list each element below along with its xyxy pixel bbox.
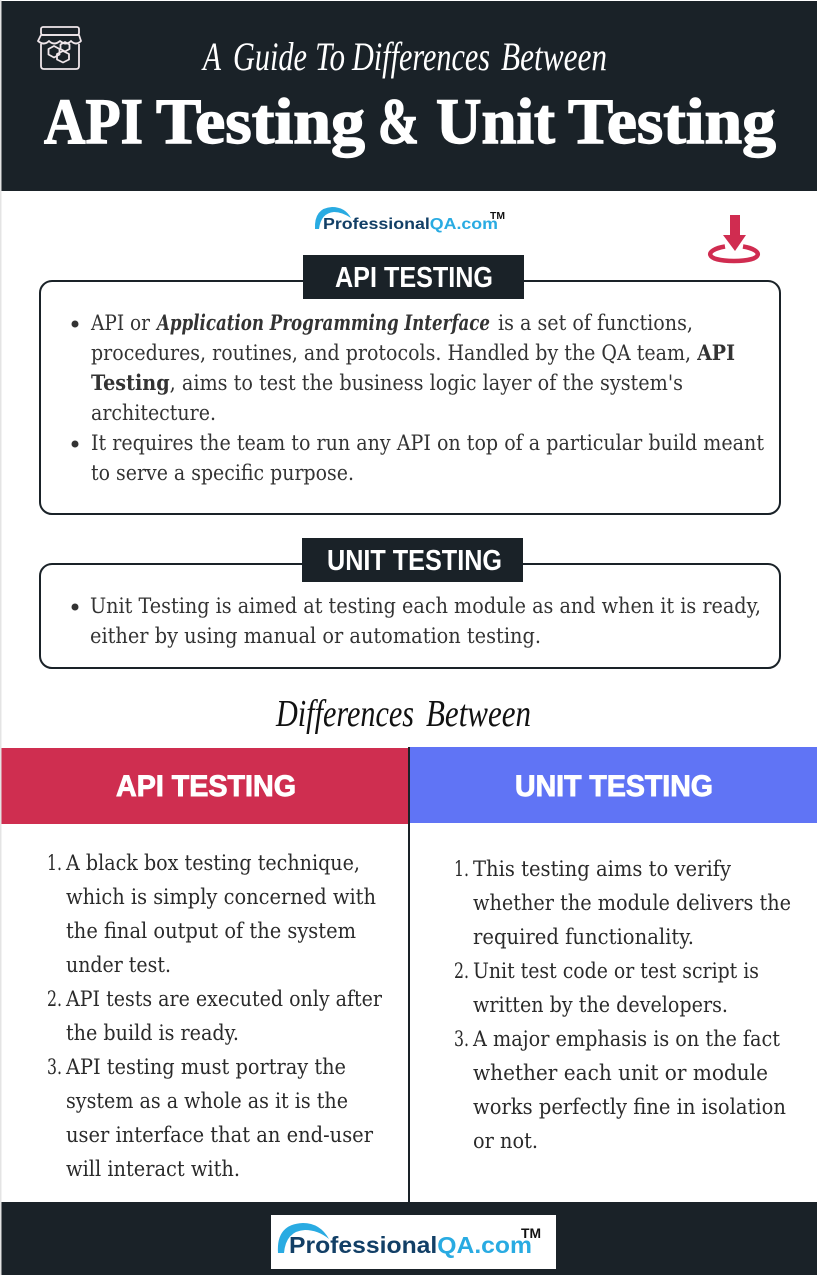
logo: ProfessionalQA.com: TM [490,211,505,222]
heading: Unit testing [302,538,523,582]
list: API testing differences: API tests are executed only after [65,987,383,1011]
footer logo: TM [521,1225,541,1241]
list: Unit testing differences: Unit test code or test script is [473,959,759,983]
API testing description: to serve a specific purpose. [91,461,354,485]
column header: Unit testing: UNIT TESTING [515,770,713,803]
API testing description: Testing, aims to test the business logic layer of the system's [91,370,683,395]
list: Unit testing differences: 2. [454,959,469,983]
list: API testing differences: 3. [47,1055,62,1079]
list: API testing differences: 1. [47,851,62,875]
list: Unit testing differences: written by the developers. [473,993,728,1017]
list: API testing differences: user interface that an end-user [66,1123,374,1147]
list: API testing differences: which is simply concerned with [66,885,376,909]
title: API [44,86,143,158]
list: API testing differences: system as a whole as it is the [66,1089,348,1113]
list: API testing differences: the build is ready. [66,1021,239,1045]
icon: honey jar [38,27,81,69]
heading: Differences Between [275,693,531,735]
title: Testing [568,86,776,158]
list: Unit testing differences: whether each unit or module [473,1061,768,1085]
subtitle: Between [501,34,607,79]
API testing description: Application Programming Interface [155,310,490,335]
list: API testing differences: under test. [66,953,171,977]
list: Unit testing differences: 3. [454,1027,469,1051]
subtitle: A [201,34,221,79]
panel: Unit testing [40,538,780,668]
panel: API testing [40,255,780,514]
API testing description: is a set of functions, [498,311,693,335]
logo: ProfessionalQA.com: Professional QA.com [323,216,498,233]
column header: Unit testing [410,747,817,823]
heading: API testing: API TESTING [335,262,493,294]
logo: ProfessionalQA.com [315,207,505,233]
list: Unit testing differences: works perfectly fine in isolation [473,1095,786,1119]
title [44,86,776,158]
list: Unit testing differences [454,857,791,1153]
subtitle: To [315,34,345,79]
list: Unit testing differences: required functionality. [473,925,694,949]
list: API testing differences [47,851,383,1181]
column header: API testing [2,748,408,824]
Unit testing description: either by using manual or automation testing. [90,624,541,648]
footer [2,1202,817,1275]
list: API testing differences: the final output of the system [66,919,356,943]
title: Testing [156,86,365,158]
list: API testing differences: 2. [47,987,62,1011]
subtitle: Differences [351,34,490,79]
list: Unit testing differences: This testing aims to verify [473,857,731,881]
API testing description: architecture. [91,401,216,425]
Unit testing description [72,594,761,648]
list: API testing differences: will interact with. [66,1157,240,1181]
footer logo [271,1215,556,1269]
subtitle [201,34,607,79]
heading: Differences Between: Between [426,693,531,735]
list: Unit testing differences: whether the module delivers the [473,891,791,915]
API testing description: It requires the team to run any API on top of a particular build meant [91,431,764,455]
list: Unit testing differences: 1. [454,857,469,881]
heading: Unit testing: UNIT TESTING [327,545,502,577]
API testing description: API or [90,311,151,335]
API testing description: procedures, routines, and protocols. Handled by the QA team, API [91,340,735,365]
list: API testing differences: API testing must portray the [65,1055,346,1079]
API testing description [72,310,764,485]
heading: API testing [303,255,524,299]
header banner [2,1,817,191]
title: & [378,86,419,158]
heading: Differences Between: Differences [275,693,414,735]
list: Unit testing differences: A major emphasis is on the fact [472,1027,781,1051]
column header: API testing: API TESTING [116,770,296,803]
icon: download arrow [710,215,758,261]
subtitle: Guide [233,34,307,79]
list: Unit testing differences: or not. [473,1129,538,1153]
footer logo: Professional QA.com [289,1232,532,1258]
title: Unit [436,86,555,158]
list: API testing differences: A black box testing technique, [65,851,360,875]
Unit testing description: Unit Testing is aimed at testing each module as and when it is ready, [90,594,761,618]
